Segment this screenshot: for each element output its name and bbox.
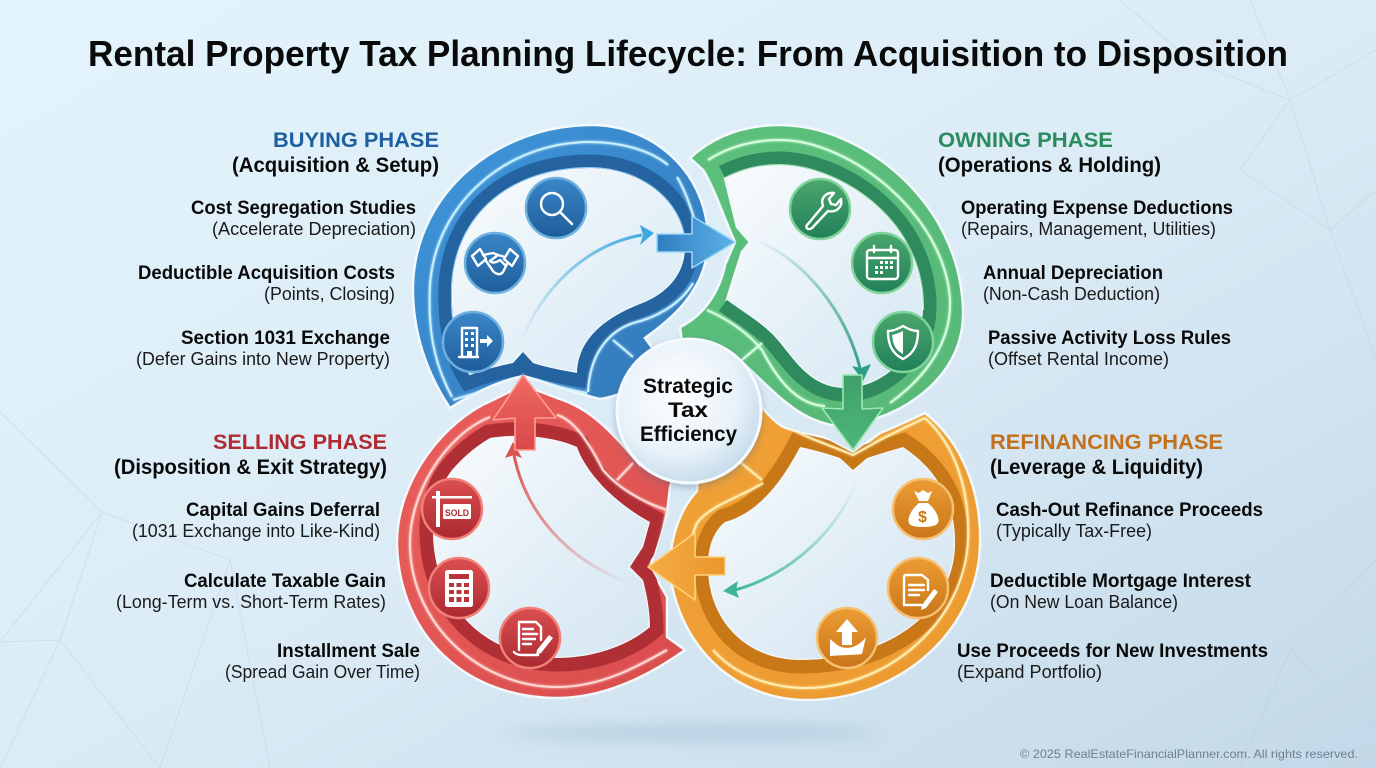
refinancing item: cash-out: (Typically Tax-Free) [996, 521, 1152, 541]
arrow: owning to refinancing [822, 375, 883, 450]
selling item: installment sale: (Spread Gain Over Time) [225, 662, 420, 682]
selling phase heading: (Disposition & Exit Strategy) [114, 456, 387, 479]
owning item: operating expenses: Operating Expense Deductions [961, 198, 1233, 219]
selling item: capital gains: (1031 Exchange into Like-Kind) [132, 521, 380, 541]
buying item: cost segregation: Cost Segregation Studies [191, 198, 416, 219]
arrow: buying inner curve [520, 225, 654, 345]
panel: owning ring [680, 125, 963, 427]
refinancing phase heading [990, 430, 1223, 479]
icon: handshake [465, 233, 525, 293]
owning item: operating expenses [961, 198, 1233, 239]
buying item: cost segregation: (Accelerate Depreciation) [212, 219, 416, 239]
owning item: passive loss: (Offset Rental Income) [988, 349, 1169, 369]
selling item: taxable gain [116, 571, 386, 612]
icon: sold sign [422, 479, 482, 539]
buying item: acquisition costs: (Points, Closing) [264, 284, 395, 304]
refinancing item: new investments: (Expand Portfolio) [957, 662, 1102, 682]
hub label [640, 375, 737, 446]
center hub [617, 339, 761, 483]
title: Rental Property Tax Planning Lifecycle: From Acquisition to Disposition [88, 33, 1288, 74]
refinancing item: mortgage interest: (On New Loan Balance) [990, 592, 1178, 612]
hub label: Efficiency [640, 423, 737, 446]
icon: wrench [790, 179, 850, 239]
buying item: acquisition costs: Deductible Acquisition Costs [138, 263, 395, 284]
refinancing item: new investments: Use Proceeds for New Investments [957, 641, 1268, 662]
hub label: Strategic [643, 375, 733, 398]
buying phase heading: (Acquisition & Setup) [232, 154, 439, 177]
refinancing item: cash-out: Cash-Out Refinance Proceeds [996, 500, 1263, 521]
panel: refinancing ring [670, 405, 980, 700]
refinancing item: mortgage interest: Deductible Mortgage Interest [990, 571, 1252, 592]
icon: up arrow with growth [817, 608, 877, 668]
arrow: selling inner curve [505, 442, 630, 583]
selling item: taxable gain: Calculate Taxable Gain [184, 571, 386, 592]
selling item: taxable gain: (Long-Term vs. Short-Term Rates) [116, 592, 386, 612]
icon: sold sign: SOLD [445, 508, 469, 518]
icon: building with arrow [443, 312, 503, 372]
icon: money bag [893, 479, 953, 539]
selling item: installment sale: Installment Sale [277, 641, 420, 662]
buying item: section 1031 [136, 328, 390, 369]
selling phase heading [114, 430, 387, 479]
arrow: buying to owning [657, 216, 735, 268]
icon: magnifier [526, 178, 586, 238]
selling item: capital gains: Capital Gains Deferral [186, 500, 380, 521]
ground shadow [500, 727, 880, 739]
owning phase heading: (Operations & Holding) [938, 154, 1161, 177]
selling phase heading: SELLING PHASE [213, 430, 387, 454]
refinancing item: mortgage interest [990, 571, 1252, 612]
buying phase heading [232, 128, 439, 177]
buying item: acquisition costs [138, 263, 395, 304]
buying phase heading: BUYING PHASE [273, 128, 439, 152]
panel: selling ring [397, 385, 690, 698]
refinancing item: cash-out [996, 500, 1263, 541]
selling item: installment sale [225, 641, 420, 682]
arrow: owning inner curve [760, 242, 871, 381]
buying item: cost segregation [191, 198, 416, 239]
icon: money bag: $ [918, 509, 927, 526]
arrow: selling to buying [493, 375, 556, 450]
owning item: passive loss: Passive Activity Loss Rules [988, 328, 1231, 349]
icon: calendar [852, 233, 912, 293]
hub label: Tax [668, 399, 708, 422]
panel: buying ring [413, 125, 708, 408]
owning phase heading: OWNING PHASE [938, 128, 1113, 152]
selling item: capital gains [132, 500, 380, 541]
refinancing item: new investments [957, 641, 1268, 682]
refinancing phase heading: (Leverage & Liquidity) [990, 456, 1203, 479]
footer copyright: © 2025 RealEstateFinancialPlanner.com. All rights reserved. [1020, 747, 1358, 761]
icon: shield [873, 312, 933, 372]
refinancing phase heading: REFINANCING PHASE [990, 430, 1223, 454]
arrow: refinancing inner curve [723, 478, 857, 598]
owning item: passive loss [988, 328, 1231, 369]
icon: contract and pen [500, 608, 560, 668]
buying item: section 1031: Section 1031 Exchange [181, 328, 390, 349]
owning item: operating expenses: (Repairs, Management, Utilities) [961, 219, 1216, 239]
owning item: annual depreciation: (Non-Cash Deduction) [983, 284, 1160, 304]
icon: calculator [429, 558, 489, 618]
owning phase heading [938, 128, 1161, 177]
buying item: section 1031: (Defer Gains into New Property) [136, 349, 390, 369]
icon: document and pen [888, 558, 948, 618]
owning item: annual depreciation: Annual Depreciation [983, 263, 1163, 284]
owning item: annual depreciation [983, 263, 1163, 304]
arrow: refinancing to selling [648, 533, 725, 600]
